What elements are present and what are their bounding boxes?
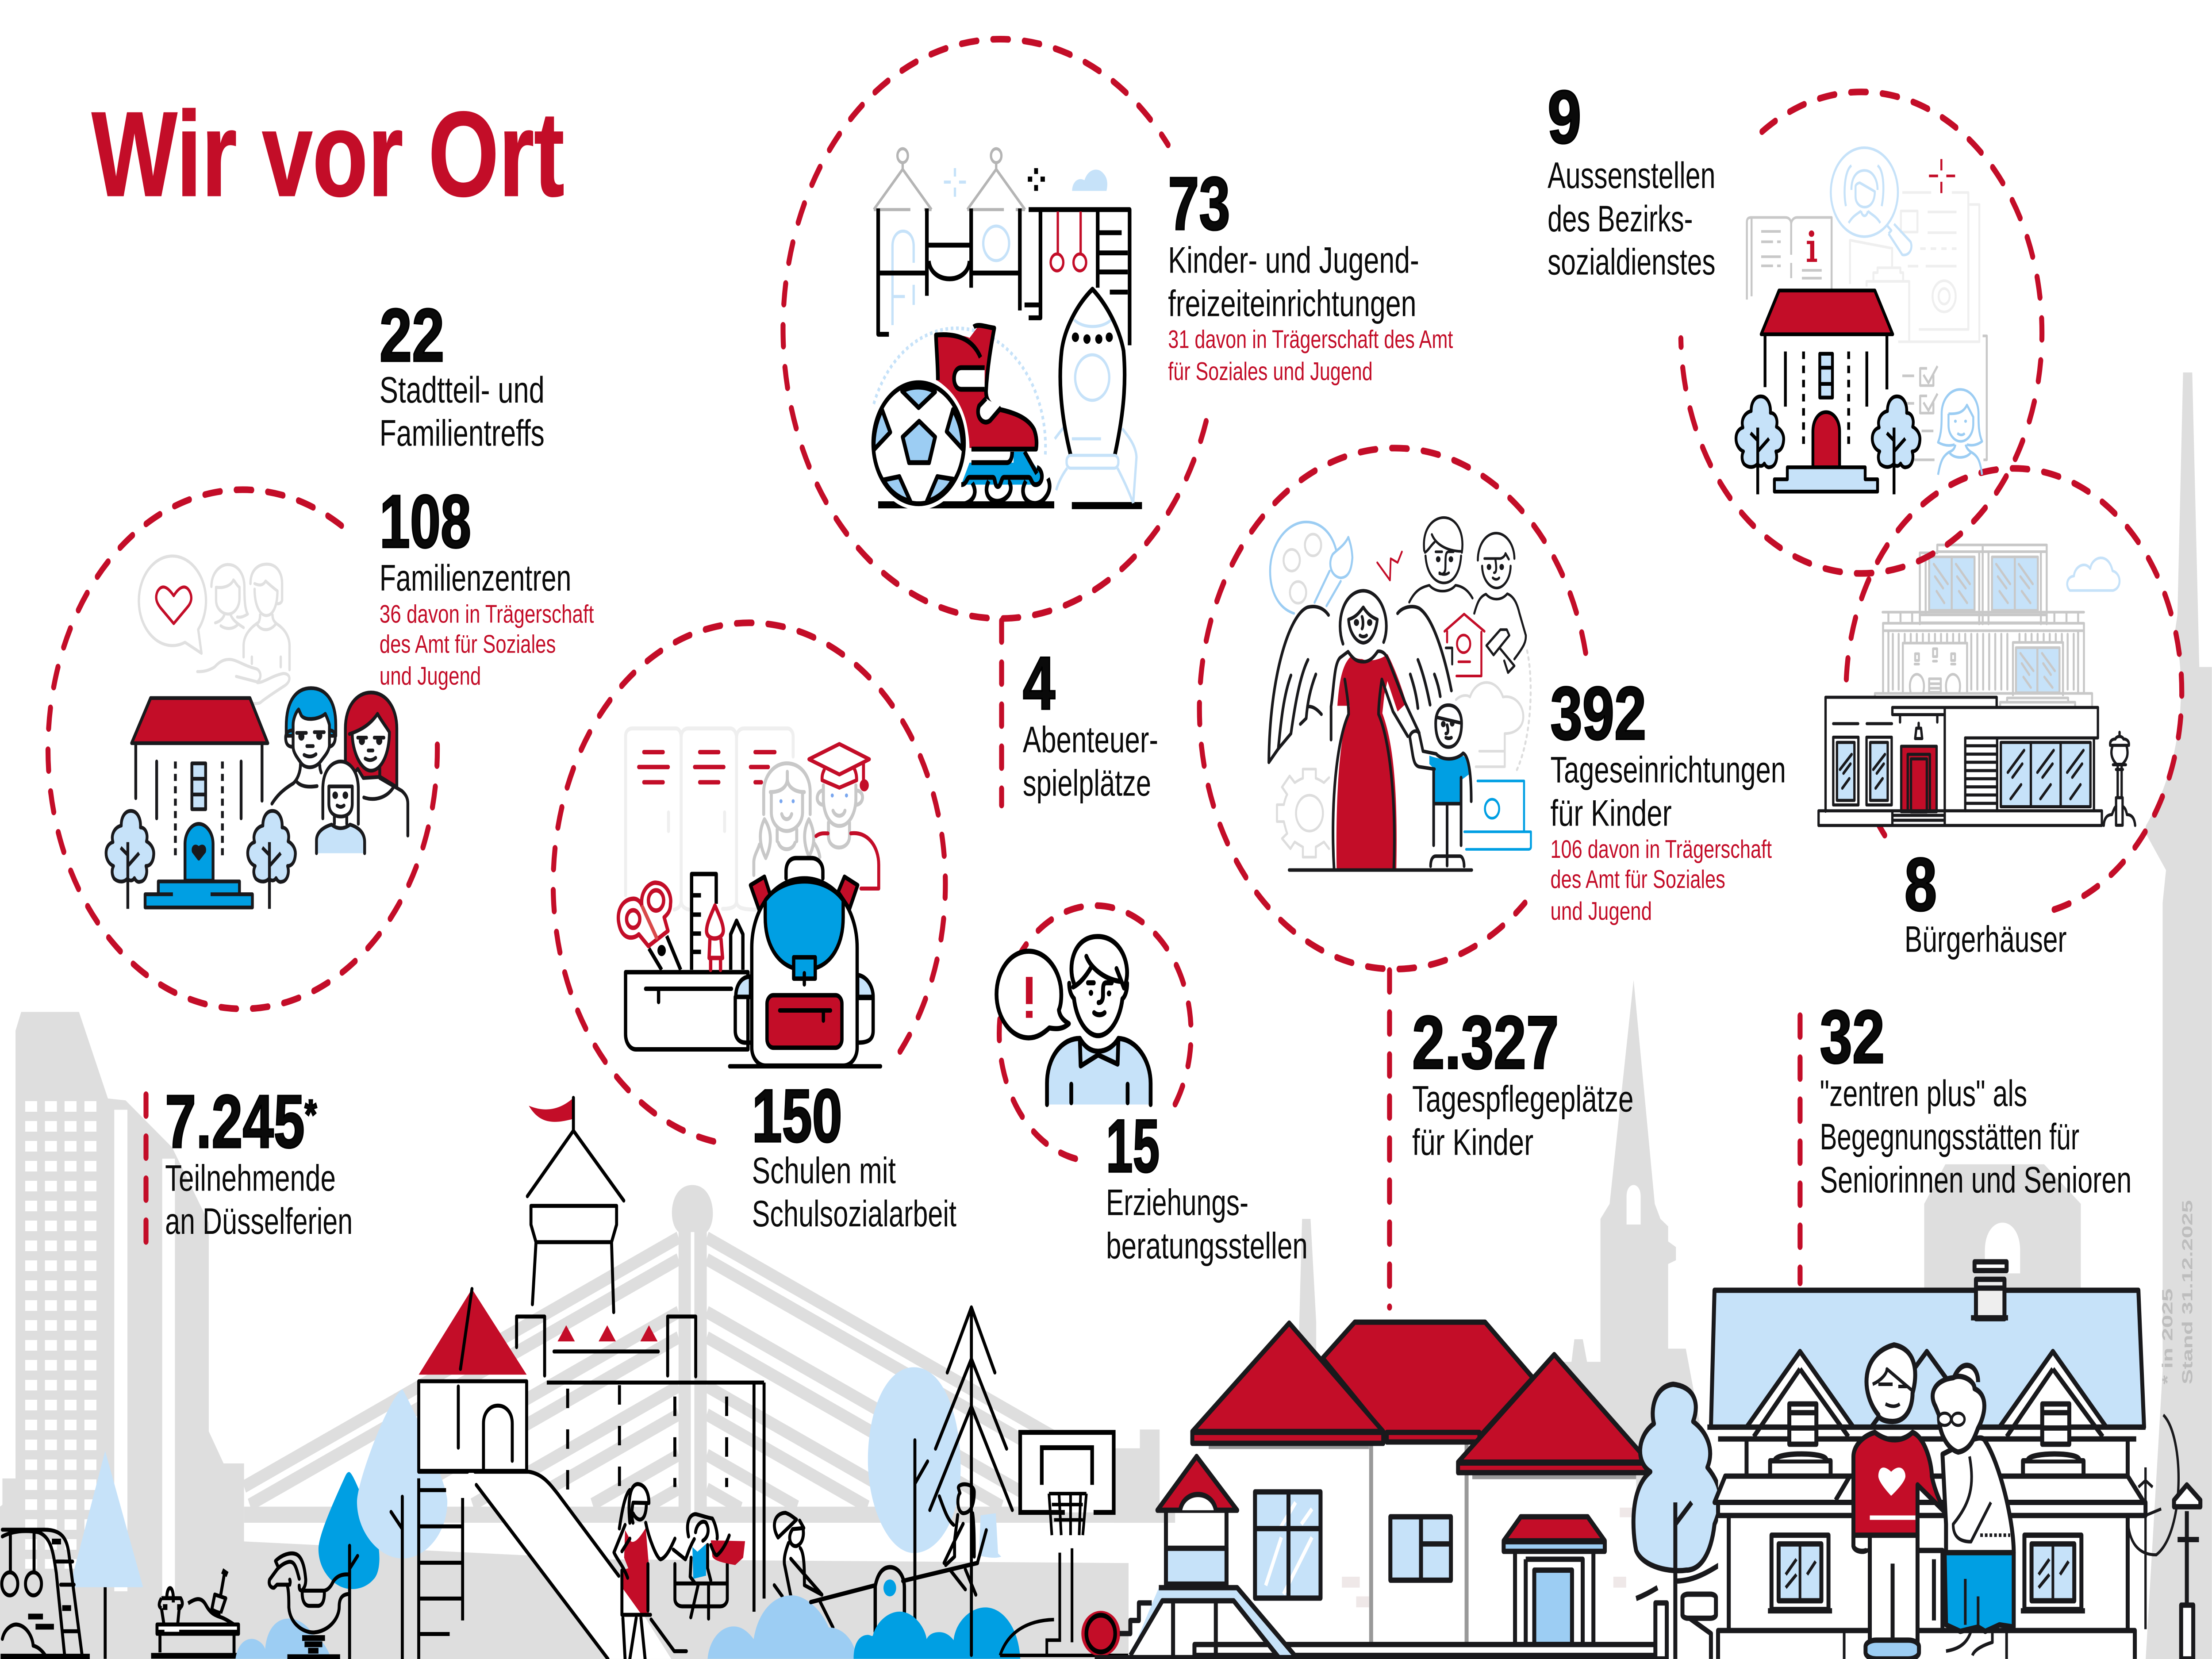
climbing frame <box>2 1530 82 1658</box>
skyline: low buildings behind the house <box>1114 1429 1160 1533</box>
tree: light blue conifer <box>69 1451 143 1587</box>
text: 108 Familienzentren: Familienzentren <box>380 557 571 599</box>
text: 7.245 Teilnehmende an Düsselferien: an Düsselferien <box>165 1200 353 1242</box>
battlement and beams <box>517 1317 696 1376</box>
text: 150 Schulen mit Schulsozialarbeit: 150 <box>752 1074 842 1158</box>
slide <box>476 1472 671 1659</box>
text: 150 Schulen mit Schulsozialarbeit <box>752 1074 956 1234</box>
dashed connector <box>143 1094 150 1241</box>
illustration: counsellor with speech bubble <box>997 937 1151 1105</box>
text: 8 Bürgerhäuser: Bürgerhäuser <box>1905 918 2067 960</box>
dashed circle <box>553 623 945 1142</box>
skyline: bridge deck <box>244 1507 1175 1523</box>
text: 392 Tageseinrichtungen für Kinder: des Amt für Soziales <box>1550 865 1725 893</box>
text: 392 Tageseinrichtungen für Kinder: Tageseinrichtungen <box>1550 749 1786 791</box>
kindergarten back roof <box>1323 1322 1533 1437</box>
text: 392 Tageseinrichtungen für Kinder: 392 <box>1550 671 1646 755</box>
child pushing <box>774 1513 833 1628</box>
flag <box>529 1098 573 1122</box>
dormer windows <box>1770 1404 2084 1476</box>
text: 2.327 Tagespflegeplätze: Tagespflegeplätze <box>1412 1078 1634 1120</box>
kindergarten roofs <box>1192 1323 1383 1432</box>
text: 15 Erziehungsberatungsstellen <box>1106 1104 1308 1266</box>
tree trunk and pine <box>915 1440 928 1619</box>
text: 73 Kinder- und Jugendfreizeiteinrichtungen: Kinder- und Jugend- <box>1168 239 1419 281</box>
text: 8 Bürgerhäuser: 8 <box>1905 842 1937 926</box>
scene: kindergarten and senior house <box>1094 1262 2200 1659</box>
title: Wir vor Ort <box>92 87 565 221</box>
lower windows <box>1771 1535 1828 1609</box>
text: 150 Schulen mit Schulsozialarbeit: Schulen mit <box>752 1150 896 1191</box>
skyline: office tower <box>0 1012 1129 1659</box>
dashed circle <box>1681 92 2042 573</box>
icon: left tree <box>106 811 154 909</box>
text: 4 Abenteuerspielplätze: 4 <box>1023 641 1055 725</box>
text: 7.245 Teilnehmende an Düsselferien: * <box>305 1091 317 1137</box>
tree: oval light blue <box>868 1367 960 1553</box>
child on swing <box>692 1544 706 1579</box>
text: 108 Familienzentren: des Amt für Soziales <box>380 630 556 658</box>
red roof tower <box>419 1289 526 1375</box>
icon: right tree <box>248 811 296 909</box>
dashed connector <box>1386 971 1393 1307</box>
kindergarten door <box>1504 1517 1605 1541</box>
text: 22 Stadtteil- und Familientreffs: Stadtteil- und <box>380 369 545 411</box>
text: 7.245 Teilnehmende an Düsselferien: 7.245 <box>165 1079 305 1164</box>
text: 392 Tageseinrichtungen für Kinder: für Kinder <box>1550 792 1672 834</box>
bush: mid blue <box>707 1595 857 1659</box>
text: 108 Familienzentren: 108 <box>380 479 471 563</box>
kindergarten plinth <box>1194 1644 1658 1655</box>
senior house chimney <box>1976 1279 2005 1319</box>
text: 15 Erziehungsberatungsstellen: Erziehungs- <box>1106 1182 1248 1223</box>
dashed circle <box>999 906 1191 1160</box>
tree: blue <box>319 1472 380 1589</box>
skyline: bridge pylon and cables <box>244 1238 1129 1508</box>
text: 392 Tageseinrichtungen für Kinder <box>1550 671 1786 926</box>
post <box>1000 1548 1128 1655</box>
text: 22 Stadtteil- und Familientreffs <box>380 293 545 454</box>
tree: light blue <box>357 1389 447 1559</box>
see-saw <box>811 1563 977 1632</box>
text: 73 Kinder- und Jugendfreizeiteinrichtungen <box>1168 161 1453 385</box>
panel: Bürgerhäuser circle <box>1819 468 2182 912</box>
swing seat <box>675 1564 727 1606</box>
senior house roof <box>1711 1290 2144 1427</box>
panel: Erziehungsberatung circle <box>997 906 1191 1160</box>
text: 32 zentren plus <box>1800 995 2131 1283</box>
porch <box>1714 1476 2144 1502</box>
illustration: playground, skate, ball, rocket <box>868 149 1142 510</box>
dashed circle <box>1846 469 2182 912</box>
text: 32 zentren plus: 32 <box>1820 995 1885 1079</box>
ladder <box>419 1479 463 1659</box>
text: 108 Familienzentren <box>380 479 594 690</box>
house base <box>1718 1631 2135 1659</box>
net <box>1049 1494 1087 1535</box>
skyline: church <box>1552 980 1721 1524</box>
footnote <box>2159 1200 2196 1384</box>
tree between houses <box>1633 1384 1720 1571</box>
text: 7.245 Teilnehmende an Düsselferien: Teilnehmende <box>165 1157 336 1198</box>
text: 2.327 Tagespflegeplätze: 2.327 <box>1412 1000 1559 1084</box>
sandbox <box>157 1624 238 1634</box>
woman <box>622 1528 649 1614</box>
text: 9 Aussenstellen des Bezirkssozialdienstes <box>1548 75 1716 283</box>
scene: basketball hoop <box>1000 1432 1128 1656</box>
text: 4 Abenteuerspielplätze: Abenteuer- <box>1023 719 1158 760</box>
skyline: thin spire <box>1294 1219 1316 1486</box>
rocking horse <box>235 1619 331 1659</box>
text: 22 Stadtteil- und Familientreffs: Familientreffs <box>380 412 545 454</box>
red wheel <box>1081 1611 1120 1656</box>
panel: Familienzentren circle <box>48 490 438 1009</box>
text: 392 Tageseinrichtungen für Kinder: und Jugend <box>1550 897 1652 926</box>
illustration: family and house <box>132 556 408 907</box>
text: 22 Stadtteil- und Familientreffs: 22 <box>380 293 444 377</box>
icon: left tree <box>1736 396 1784 494</box>
mailbox and post <box>1655 1603 1667 1659</box>
dashed connector <box>1797 1016 1803 1283</box>
panel: Freizeiteinrichtungen circle <box>783 39 1206 618</box>
illustration: angel mother, child, parents <box>1269 518 1531 870</box>
text: 4 Abenteuerspielplätze: spielplätze <box>1023 762 1151 804</box>
text: 7.245 Teilnehmende an Düsselferien <box>146 1079 353 1242</box>
icon: right tree <box>1872 396 1920 494</box>
right tree and lantern <box>2128 1415 2178 1629</box>
illustration: community centre <box>1819 545 2135 826</box>
text: 73 Kinder- und Jugendfreizeiteinrichtungen: 73 <box>1168 161 1230 246</box>
child on see-saw <box>939 1484 986 1595</box>
senior house walls <box>1718 1428 2139 1658</box>
dashed circle <box>783 39 1206 618</box>
footnote: Stand 31.12.2025 <box>2179 1200 2196 1384</box>
senior woman <box>1932 1365 2014 1655</box>
text: 73 Kinder- und Jugendfreizeiteinrichtungen: für Soziales und Jugend <box>1168 357 1373 385</box>
scene: castle and slide <box>419 1098 764 1659</box>
illustration: backpack, pencil case, students <box>618 729 880 1066</box>
text: 32 zentren plus: Begegnungsstätten für <box>1820 1116 2079 1157</box>
footnote: * in 2025 <box>2159 1288 2176 1384</box>
text: 73 Kinder- und Jugendfreizeiteinrichtungen: 31 davon in Trägerschaft des Amt <box>1168 325 1453 353</box>
kindergarten bricks <box>1342 1508 1636 1607</box>
office tower windows <box>31 1101 90 1569</box>
text: 32 zentren plus: "zentren plus" als <box>1820 1072 2027 1114</box>
text: 15 Erziehungsberatungsstellen: beratungsstellen <box>1106 1225 1308 1266</box>
text: 2.327 Tagespflegeplätze: für Kinder <box>1412 1121 1533 1163</box>
text: 108 Familienzentren: und Jugend <box>380 662 481 690</box>
backboard <box>1020 1432 1114 1513</box>
skyline cut-outs <box>114 1110 2020 1595</box>
text: 392 Tageseinrichtungen für Kinder: 106 davon in Trägerschaft <box>1550 835 1772 863</box>
background skyline <box>0 373 2212 1659</box>
skyline: big tower <box>1924 1164 2081 1317</box>
scene: playground equipment left <box>0 1389 447 1659</box>
text: 9 Aussenstellen des Bezirkssozialdienstes: Aussenstellen <box>1548 154 1716 196</box>
panel: Schulsozialarbeit circle <box>553 623 945 1142</box>
illustration: office and documents <box>1747 148 1987 492</box>
text: 150 Schulen mit Schulsozialarbeit: Schulsozialarbeit <box>752 1193 956 1234</box>
text: 2.327 Tagespflegeplätze <box>1390 971 1634 1307</box>
text: 32 zentren plus: Seniorinnen und Senioren <box>1820 1159 2131 1201</box>
text: 73 Kinder- und Jugendfreizeiteinrichtungen: freizeiteinrichtungen <box>1168 282 1417 324</box>
panel: Bezirkssozialdienst circle <box>1681 92 2042 573</box>
text: 9 Aussenstellen des Bezirkssozialdienstes: sozialdienstes <box>1548 241 1716 283</box>
kindergarten walls <box>1209 1442 1636 1659</box>
text: 9 Aussenstellen des Bezirkssozialdienstes: 9 <box>1548 75 1582 159</box>
skyline: bridge pylon mast <box>672 1185 713 1561</box>
skyline: right tower <box>2145 373 2212 1659</box>
senior man <box>1853 1345 1946 1659</box>
text: 9 Aussenstellen des Bezirkssozialdienstes: des Bezirks- <box>1548 198 1693 239</box>
dashed connector <box>998 621 1005 805</box>
text: 15 Erziehungsberatungsstellen: 15 <box>1106 1104 1160 1188</box>
small play tower <box>1157 1456 1237 1510</box>
kindergarten windows <box>1255 1492 1321 1598</box>
text: 4 Abenteuerspielplätze <box>1002 621 1158 805</box>
scene: people on the playground <box>614 1307 1020 1659</box>
lookout tower <box>527 1098 624 1312</box>
dashed circle <box>48 490 438 1009</box>
circle background <box>1848 468 2181 911</box>
panel: Tageseinrichtungen circle <box>1199 448 1586 969</box>
text: 108 Familienzentren: 36 davon in Trägerschaft <box>380 599 594 628</box>
dashed circle <box>1199 448 1586 969</box>
text: 8 Bürgerhäuser <box>1905 842 2067 960</box>
